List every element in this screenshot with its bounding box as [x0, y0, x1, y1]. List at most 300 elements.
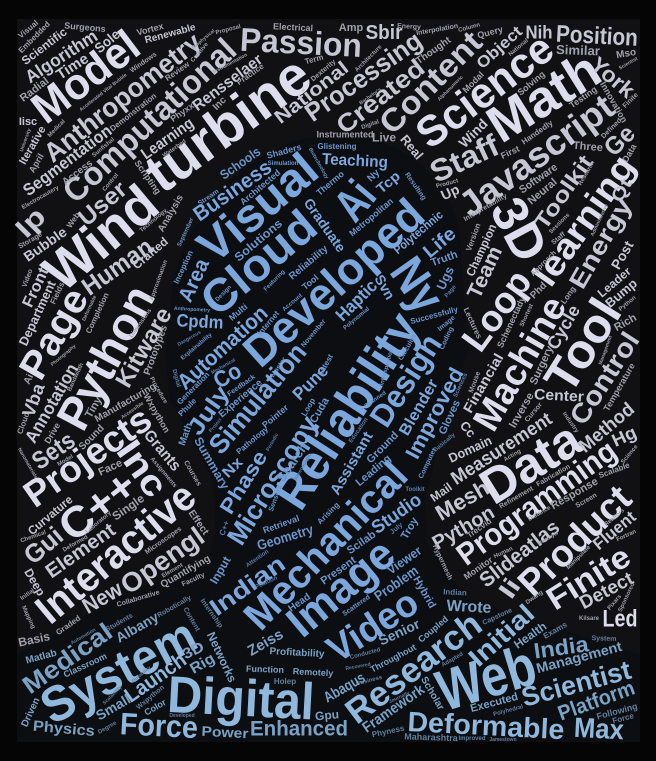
gray words: hair and background: Machine	[465, 289, 574, 438]
light blue words: shoulders: Color	[142, 697, 168, 717]
blue words: head: Stereoscopic	[292, 452, 313, 482]
blue words: head: Video	[320, 582, 426, 671]
gray words: hair and background: Monitor	[462, 554, 495, 582]
light blue words: shoulders: Robotically	[156, 594, 193, 619]
gray words: hair and background: Similar	[556, 42, 600, 58]
word: Digital: Digital	[166, 666, 316, 732]
blue words: head: Internet	[255, 309, 281, 337]
light blue words: shoulders: Journally	[388, 690, 411, 705]
gray words: hair and background: Opengl	[115, 521, 210, 600]
gray words: hair and background: Screen	[575, 492, 598, 510]
light blue words: shoulders: Degree	[97, 720, 118, 736]
gray words: hair and background: Industry	[561, 411, 580, 435]
gray words: hair and background: Electrical	[273, 21, 313, 33]
gray words: hair and background: Scripting	[133, 158, 163, 196]
gray words: hair and background: User	[73, 176, 132, 232]
light blue words: shoulders: Coupled	[416, 614, 450, 645]
light blue words: shoulders: Wxpython	[135, 684, 166, 711]
blue words: head: Shaders	[266, 142, 303, 161]
word: Deformable: Deformable	[407, 706, 565, 745]
gray words: hair and background: Three	[572, 140, 603, 154]
gray words: hair and background: Ai	[22, 372, 36, 386]
gray words: hair and background: Phd	[528, 280, 549, 301]
word: Ny: Ny	[379, 248, 454, 323]
gray words: hair and background: Method	[575, 399, 639, 457]
gray words: hair and background: learning	[524, 147, 643, 293]
gray words: hair and background: Quantifying	[159, 553, 212, 591]
gray words: hair and background: Surgeons	[64, 20, 106, 34]
blue words: head: Glistening	[317, 142, 357, 151]
gray words: hair and background: Instrumentation	[212, 52, 248, 75]
gray words: hair and background: Demonstration	[108, 91, 158, 133]
blue words: head: Nx	[219, 453, 247, 481]
blue words: head: Successfully	[409, 305, 459, 326]
light blue words: shoulders: Abaqus	[321, 669, 368, 706]
gray words: hair and background: Laboratory	[85, 510, 113, 535]
gray words: hair and background: Wxpython	[142, 392, 172, 434]
gray words: hair and background: Kitware	[110, 303, 178, 392]
gray words: hair and background: Bubble	[20, 223, 70, 265]
blue words: head: Stream	[197, 188, 220, 208]
word: Developed: Developed	[233, 188, 434, 377]
gray words: hair and background: Control	[564, 327, 646, 430]
gray words: hair and background: Sole	[91, 26, 123, 56]
gray words: hair and background: Fields	[48, 280, 67, 306]
gray words: hair and background: Content	[372, 23, 489, 141]
blue words: head: Pune	[288, 360, 332, 404]
blue words: head: Account	[282, 293, 304, 313]
gray words: hair and background: Practice	[235, 61, 266, 87]
gray words: hair and background: Interpolation	[416, 23, 459, 37]
gray words: hair and background: Curvature	[25, 492, 76, 538]
gray words: hair and background: Approach	[530, 250, 558, 278]
blue words: head: Ground	[364, 429, 401, 466]
word: Product: Product	[510, 477, 640, 605]
blue words: head: Search	[273, 440, 311, 484]
gray words: hair and background: Cc	[457, 418, 479, 440]
word: Web: Web	[429, 633, 544, 724]
gray words: hair and background: Product	[436, 178, 459, 190]
gray words: hair and background: Human	[493, 546, 514, 560]
blue words: head: Generation	[175, 370, 211, 406]
word: Force: Force	[119, 706, 199, 745]
gray words: hair and background: Human	[77, 232, 158, 301]
gray words: hair and background: Up	[438, 181, 462, 203]
light blue words: shoulders: Management	[534, 638, 624, 676]
blue words: head: Problem	[371, 562, 421, 604]
word: turbine: turbine	[132, 43, 322, 205]
gray words: hair and background: Proposal	[215, 24, 242, 36]
gray words: hair and background: Architecture	[354, 44, 384, 73]
gray words: hair and background: Procedure	[148, 376, 168, 406]
gray words: hair and background: Vortex	[136, 21, 165, 38]
blue words: head: Studio	[368, 489, 426, 539]
blue words: head: July	[182, 380, 234, 440]
light blue words: shoulders: Internship	[199, 598, 224, 629]
gray words: hair and background: Real	[397, 132, 426, 162]
gray words: hair and background: Schenectady	[495, 295, 527, 349]
blue words: head: Explainability	[180, 332, 214, 362]
light blue words: shoulders: Students	[105, 612, 134, 633]
blue words: head: Retrieval	[262, 513, 301, 535]
gray words: hair and background: Domain	[446, 433, 494, 466]
blue words: head: Summary	[191, 435, 232, 492]
head and shoulders silhouette	[17, 135, 640, 742]
word: Science: Science	[407, 24, 563, 158]
gray words: hair and background: Programming	[450, 433, 623, 572]
word: Data: Data	[470, 410, 592, 515]
gray words: hair and background: Face	[97, 457, 124, 479]
light blue words: shoulders: India	[532, 631, 591, 664]
gray words: hair and background: Nanomaterials	[16, 447, 39, 480]
gray words: hair and background: Query	[476, 24, 504, 40]
gray words: hair and background: Javascript	[451, 86, 622, 225]
blue words: head: Assistant	[327, 429, 377, 498]
blue words: head: Master	[269, 356, 288, 379]
gray words: hair and background: Rich	[612, 312, 639, 334]
gray words: hair and background: Front	[20, 264, 53, 310]
gray words: hair and background: Rensselaer	[189, 51, 266, 115]
blue words: head: Toolkit	[405, 487, 425, 493]
blue words: head: Polytechnic	[391, 207, 446, 257]
gray words: hair and background: Software	[517, 161, 560, 196]
gray words: hair and background: Prototypes	[142, 324, 170, 377]
gray words: hair and background: Sunfishal	[91, 137, 116, 159]
gray words: hair and background: Inc	[109, 432, 177, 505]
blue words: head: Computer	[418, 447, 438, 480]
blue words: head: Phule	[176, 396, 199, 418]
blue words: head: Schools	[217, 144, 263, 182]
gray words: hair and background: Surgery	[528, 343, 556, 387]
blue words: head: Polynomial	[343, 306, 371, 331]
blue words: head: Tcp	[373, 168, 403, 197]
gray words: hair and background: Column	[458, 22, 481, 34]
blue words: head: Microscopy	[221, 411, 324, 550]
gray words: hair and background: Iisc	[19, 116, 37, 128]
gray words: hair and background: Radial	[18, 75, 51, 104]
gray words: hair and background: Waterbed	[162, 139, 188, 159]
gray words: hair and background: Graded	[54, 614, 82, 637]
gray words: hair and background: Testing	[567, 84, 599, 110]
light blue words: shoulders: Maharashtra	[404, 731, 459, 743]
blue words: head: Indian	[205, 550, 291, 622]
light blue words: shoulders: Albany	[113, 608, 161, 646]
word: Scientist: Scientist	[518, 655, 634, 713]
gray words: hair and background: Champion	[463, 222, 499, 278]
light blue words: shoulders: Medical	[17, 618, 118, 700]
gray words: hair and background: Projects	[16, 398, 159, 515]
blue words: head: C++	[218, 519, 231, 537]
blue words: head: Mechanical	[210, 357, 237, 376]
gray words: hair and background: Creative	[190, 41, 210, 64]
light blue words: shoulders: Improved	[458, 736, 486, 742]
gray words: hair and background: Crafted	[130, 234, 171, 272]
light blue words: shoulders: Durability	[131, 665, 152, 684]
gray words: hair and background: Detect	[576, 568, 638, 614]
light blue words: shoulders: Enhanced	[250, 718, 348, 741]
gray words: hair and background: Drive	[42, 421, 62, 445]
word: Reliability: Reliability	[263, 302, 431, 519]
blue words: head: Blender	[396, 377, 442, 439]
gray words: hair and background: Lectures	[462, 306, 484, 341]
blue words: head: Geometry	[255, 521, 315, 553]
blue words: head: Loop	[300, 396, 317, 418]
gray words: hair and background: Annotation	[21, 360, 82, 446]
gray words: hair and background: Realtors	[604, 507, 626, 528]
gray words: hair and background: National	[271, 58, 353, 128]
light blue words: shoulders: Phyness	[371, 723, 406, 739]
blue words: head: Teaching	[322, 151, 388, 171]
gray words: hair and background: Kilsare	[579, 616, 600, 622]
blue words: head: Experience	[217, 377, 265, 420]
light blue words: shoulders: Zeiss	[245, 626, 286, 660]
blue words: head: Co	[209, 357, 246, 394]
gray words: hair and background: Energy	[397, 23, 421, 31]
blue words: head	[171, 142, 470, 671]
light blue words: shoulders: Executed	[469, 691, 519, 715]
light blue words: shoulders: Recovered	[345, 662, 371, 672]
blue words: head: Troy	[399, 515, 421, 542]
blue words: head: Graduate	[301, 195, 349, 255]
word: Interactive: Interactive	[26, 473, 205, 633]
gray words: hair and background: Inc	[211, 94, 229, 113]
light blue words: shoulders: Scalability	[102, 685, 124, 706]
light blue words: shoulders: Launch	[120, 648, 191, 707]
gray words: hair and background: Dimensions	[129, 307, 154, 339]
gray words: hair and background: Multilayer	[537, 530, 560, 547]
blue words: head: Multi	[227, 302, 249, 323]
blue words: head: Automation	[172, 300, 273, 394]
light blue words: shoulders: 3D	[180, 638, 207, 663]
blue words: head: Scilab	[345, 528, 378, 557]
blue words: head: Resulting	[403, 172, 427, 202]
gray words: hair and background: Visual	[16, 18, 40, 40]
blue words: head: Haptic	[332, 276, 381, 325]
light blue words: shoulders: Small	[93, 691, 133, 723]
gray words: hair and background: Hg	[609, 422, 640, 451]
gray words: hair and background: Digital	[361, 119, 380, 131]
blue words: head: Design	[215, 284, 233, 303]
gray words: hair and background: University	[19, 128, 33, 153]
gray words: hair and background: April	[27, 152, 46, 175]
blue words: head: Hybrid	[410, 574, 438, 611]
gray words: hair and background: Management	[598, 335, 614, 366]
blue words: head: Area	[174, 255, 214, 306]
blue words: head: Pathology	[235, 424, 270, 456]
blue words: head: Anthropometry	[174, 306, 210, 314]
light blue words: shoulders: Initial	[462, 598, 540, 673]
light blue words: shoulders: Jamestown	[489, 737, 517, 743]
gray words: hair and background: Inverse	[507, 391, 537, 430]
gray words: hair and background: Dexterity	[310, 58, 337, 83]
blue words: head: Improved	[401, 364, 469, 463]
gray words: hair and background: Accessible	[120, 401, 145, 421]
word: Passion: Passion	[239, 21, 363, 64]
blue words: head: Periodic	[265, 432, 280, 452]
word: Ai: Ai	[323, 170, 386, 231]
light blue words: shoulders: Networks	[204, 630, 240, 685]
light blue words: shoulders: Function	[246, 664, 284, 675]
gray words: hair and background: Ii	[493, 573, 526, 604]
gray words: hair and background: Bump	[602, 276, 640, 311]
blue words: head: Gloves	[437, 398, 463, 437]
gray words: hair and background: Administrative	[590, 203, 610, 237]
blue words: head: Thermo	[314, 168, 346, 198]
gray words: hair and background: Mapping	[20, 605, 36, 630]
word: Wind: Wind	[32, 173, 170, 303]
gray words: hair and background: Defined	[600, 117, 623, 140]
word: Python: Python	[46, 276, 165, 438]
gray words: hair and background: Created	[331, 54, 430, 140]
gray words: hair and background: Data	[620, 141, 639, 164]
blue words: head: Head	[286, 591, 313, 614]
blue words: head: Design	[362, 327, 449, 433]
gray words: hair and background: Embedded	[17, 20, 52, 55]
blue words: head: Arising	[315, 500, 341, 526]
gray words: hair and background: Effect	[186, 508, 211, 538]
gray words: hair and background: Term	[304, 53, 324, 66]
gray words: hair and background: Post	[608, 238, 637, 272]
blue words: head: Digital	[171, 369, 181, 388]
gray words: hair and background: Team	[463, 243, 507, 302]
gray words: hair and background: Initial	[20, 588, 36, 602]
blue words: head: Latest	[316, 352, 335, 378]
blue words: head: Scanned	[364, 390, 388, 410]
gray words: hair and background: Staff	[550, 231, 567, 246]
gray words: hair and background: Biophysical	[191, 28, 217, 51]
light blue words: shoulders: Platform	[555, 677, 638, 725]
light blue words: shoulders: Automation	[70, 627, 97, 646]
gray words: hair and background: Manufacturing	[93, 381, 158, 425]
blue words: head: Attention	[245, 549, 270, 569]
gray words: hair and background: Wind	[455, 115, 491, 151]
gray words: hair and background: Renewable	[144, 22, 197, 46]
blue words: head: Feedback	[226, 374, 257, 398]
blue words: head: Sensors	[268, 484, 284, 513]
blue words: head: Coding	[439, 326, 455, 351]
gray words: hair and background: Mesh	[431, 475, 494, 526]
gray words: hair and background: Grants	[140, 427, 184, 475]
blue words: head: Viewer	[384, 543, 424, 577]
gray words: hair and background: First	[499, 144, 521, 161]
blue words: head: Calculus	[398, 333, 418, 362]
gray words: hair and background: York	[586, 52, 641, 103]
blue words: head: Cpdm	[176, 310, 224, 333]
blue words: head: Dangerous	[177, 329, 202, 348]
blue words: head: Simulation	[268, 161, 299, 167]
gray words: hair and background: Object	[474, 23, 527, 73]
light blue words: shoulders: Capstone	[481, 607, 513, 627]
gray words: hair and background: Department	[16, 278, 59, 348]
gray words: hair and background: Energy	[564, 193, 638, 294]
light blue words: shoulders: Rig	[187, 650, 218, 678]
gray words: hair and background: Python	[618, 295, 638, 313]
blue words: head: Present	[319, 554, 359, 587]
gray words: hair and background: Algorithm	[21, 26, 101, 87]
light blue words: shoulders: Physics	[32, 718, 96, 740]
gray words: hair and background: Web	[65, 211, 82, 230]
blue words: head: Input	[207, 554, 234, 586]
blue words: head: Tool	[300, 272, 320, 292]
gray words: hair and background: Bandwidth	[67, 362, 85, 393]
gray words: hair and background: Mouse	[468, 371, 482, 394]
gray words: hair and background: Hypermesh	[431, 544, 453, 581]
gray words: hair and background: Ge	[598, 119, 641, 162]
gray words: hair and background: Review	[163, 59, 192, 83]
gray words: hair and background: Alphanumeric	[437, 75, 465, 102]
gray words: hair and background: Response	[549, 475, 600, 512]
gray words: hair and background: Dwang	[525, 590, 545, 606]
gray words: hair and background: Completion	[84, 291, 111, 335]
gray words: hair and background: Deformable	[81, 294, 98, 322]
gray words: hair and background: Iterative	[17, 124, 49, 167]
gray words: hair and background: Financial	[460, 350, 506, 416]
blue words: head: Math	[177, 422, 195, 447]
gray words: hair and background: Processing	[299, 25, 428, 128]
gray words: hair and background: Vba	[18, 380, 49, 420]
gray words: hair and background: Finite	[622, 92, 640, 110]
blue words: head: Solutions	[231, 216, 285, 264]
gray words: hair and background: Cloud	[15, 411, 31, 435]
blue words: head: Svn	[372, 272, 398, 302]
light blue words: shoulders: Driven	[19, 696, 43, 729]
gray words: hair and background: Shortest	[519, 303, 535, 328]
light blue words: shoulders: Throughout	[368, 642, 418, 674]
blue words: head: Truth	[429, 248, 460, 269]
gray words: hair and background: Segmentation	[19, 121, 115, 200]
gray words: hair and background: Learning	[138, 115, 197, 163]
gray words: hair and background: Measurement	[447, 408, 557, 490]
gray words: hair and background: Basis	[17, 629, 51, 649]
gray words: hair and background: Mail	[428, 480, 455, 505]
word: System: System	[31, 607, 206, 735]
light blue words: shoulders: Health	[511, 619, 549, 652]
gray words: hair and background: Electrocautery	[21, 185, 61, 211]
blue words: head: Reliability	[287, 243, 331, 282]
light blue words: shoulders: Adapted	[441, 651, 465, 669]
light blue words: shoulders	[17, 587, 639, 745]
gray words: hair and background: Modal	[460, 69, 486, 95]
light blue words: shoulders: Content	[181, 606, 201, 633]
light blue words: shoulders: Matlab	[25, 648, 58, 666]
light blue words: shoulders: Exams	[542, 620, 569, 641]
blue words: head: Sciences	[453, 372, 470, 399]
gray words: hair and background: Position	[555, 21, 639, 52]
gray words: hair and background: Tiny	[83, 394, 105, 420]
word: Mechanical: Mechanical	[236, 453, 417, 639]
gray words: hair and background: Qt	[607, 175, 636, 206]
gray words: hair and background: Element	[161, 563, 184, 579]
blue words: head: Leading	[354, 453, 394, 489]
light blue words: shoulders: Power	[201, 723, 249, 741]
blue words: head: September	[177, 217, 196, 248]
word: Cloud: Cloud	[190, 199, 327, 326]
blue words: head: July	[389, 522, 404, 536]
gray words: hair and background: Solving	[515, 69, 547, 97]
light blue words: shoulders: Developed	[169, 713, 195, 719]
gray words: hair and background: Mso	[615, 47, 637, 61]
word: Max: Max	[573, 712, 625, 745]
gray words: hair and background: Control	[102, 172, 120, 193]
gray words: hair and background: Neural	[526, 176, 560, 207]
blue words: head: Metropolitan	[347, 196, 395, 238]
gray words: hair and background: Single	[109, 491, 147, 523]
gray words: hair and background: Storage	[17, 231, 44, 250]
gray words: hair and background: Research	[578, 160, 597, 187]
gray words: hair and background: Leader	[595, 264, 634, 300]
gray words: hair and background: Trecvid	[465, 517, 493, 540]
gray words: hair and background: Chemical	[20, 530, 47, 544]
